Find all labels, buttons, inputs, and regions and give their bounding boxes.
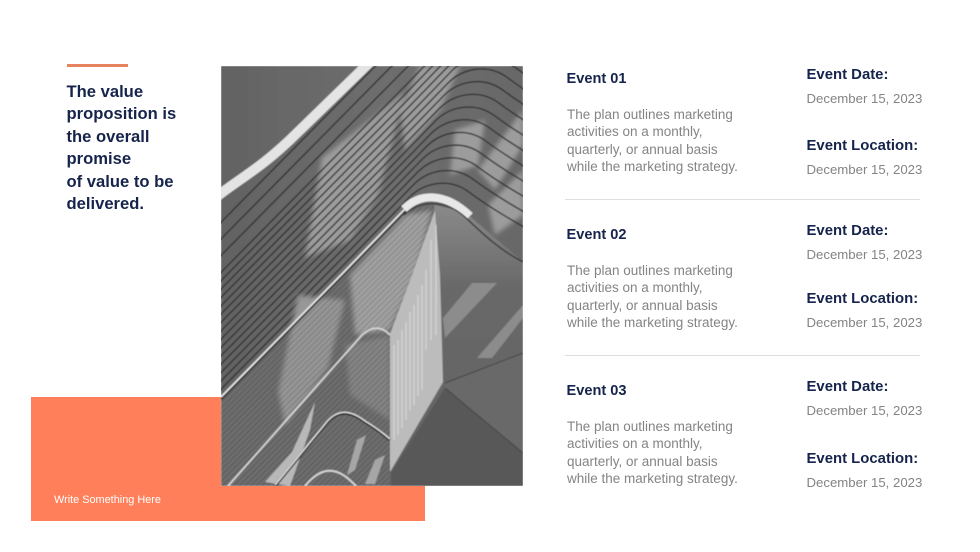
heading: value proposition <box>66 82 176 213</box>
event description <box>567 262 738 330</box>
crest band <box>404 197 470 216</box>
event location: Event Location: <box>806 451 918 467</box>
event description: The plan outlines marketing <box>567 418 733 434</box>
event title: Event 03 <box>566 383 627 399</box>
event description: quarterly, or annual basis <box>567 298 718 313</box>
heading: value proposition: proposition is <box>66 104 176 123</box>
event description: quarterly, or annual basis <box>567 142 718 157</box>
event date: December 15, 2023 <box>806 91 922 106</box>
panel: event 03 <box>566 379 922 490</box>
event location <box>806 138 922 177</box>
orange block <box>31 397 425 521</box>
event description: while the marketing strategy. <box>567 159 738 174</box>
event description: quarterly, or annual basis <box>567 454 718 469</box>
lower-left striped wall <box>221 205 435 486</box>
event date: Event Date: <box>806 379 888 395</box>
event description: The plan outlines marketing <box>567 106 733 122</box>
lower arches <box>228 328 390 486</box>
light patches on upper stripes <box>305 66 523 258</box>
event description <box>567 106 738 174</box>
accent rule <box>67 64 128 67</box>
event location <box>806 451 922 490</box>
event date: Event Date: <box>806 223 888 239</box>
event date <box>806 379 922 418</box>
heading: value proposition: The value <box>66 82 143 101</box>
event title: Event 02 <box>566 227 627 243</box>
right wall and floor <box>390 205 523 486</box>
main thin curved line <box>221 211 405 399</box>
event title: Event 01 <box>566 71 627 87</box>
caption: write something here: Write Something Here <box>54 494 161 506</box>
event location: December 15, 2023 <box>806 315 922 330</box>
light panel <box>390 210 443 472</box>
event description: while the marketing strategy. <box>567 471 738 486</box>
event date <box>806 67 922 106</box>
event date <box>806 223 922 262</box>
event location <box>806 291 922 330</box>
event date: December 15, 2023 <box>806 403 922 418</box>
photo: curved architecture <box>221 66 523 486</box>
heading: value proposition: delivered. <box>66 194 144 213</box>
event description: The plan outlines marketing <box>567 262 733 278</box>
event date: Event Date: <box>806 67 888 83</box>
event location: Event Location: <box>806 138 918 154</box>
event date: December 15, 2023 <box>806 247 922 262</box>
heading: value proposition: of value to be <box>66 172 173 191</box>
event description: activities on a monthly, <box>567 436 703 451</box>
heading: value proposition: promise <box>66 149 131 168</box>
event description: activities on a monthly, <box>567 280 703 295</box>
white upper band <box>215 62 370 198</box>
panel: event 01 <box>566 67 922 177</box>
panel: event 02 <box>566 223 922 330</box>
event description: while the marketing strategy. <box>567 315 738 330</box>
event location: December 15, 2023 <box>806 475 922 490</box>
heading: value proposition: the overall <box>66 127 150 146</box>
event description: activities on a monthly, <box>567 124 703 139</box>
stripes <box>104 0 650 507</box>
event location: December 15, 2023 <box>806 162 922 177</box>
event description <box>567 418 738 486</box>
event location: Event Location: <box>806 291 918 307</box>
